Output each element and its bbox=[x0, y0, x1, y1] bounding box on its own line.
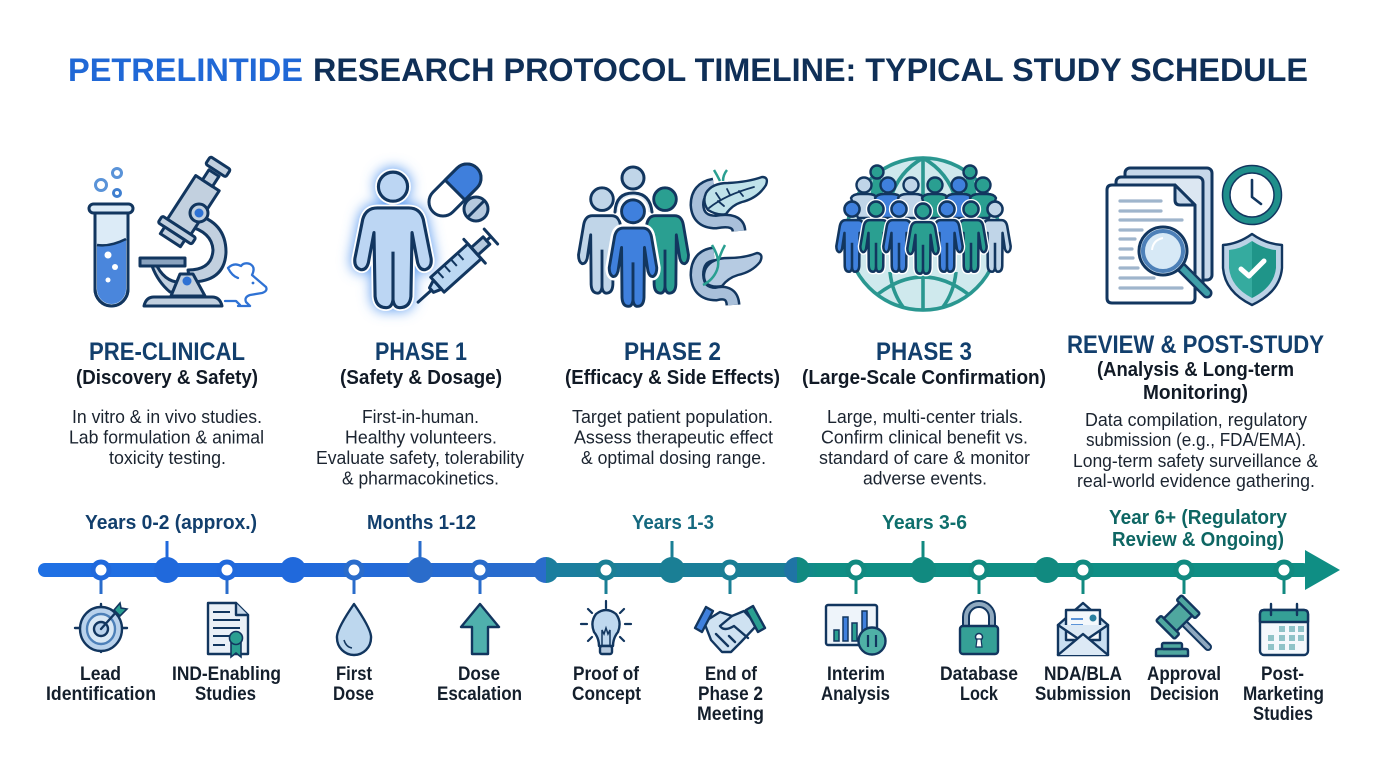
milestone: lead identification bbox=[46, 603, 156, 705]
label: End of bbox=[705, 664, 758, 685]
label: Escalation bbox=[437, 684, 522, 705]
period labels bbox=[85, 507, 1288, 551]
milestone: IND-enabling studies bbox=[172, 603, 281, 705]
label: Proof of bbox=[573, 664, 640, 685]
panel: phase 2 bbox=[565, 167, 780, 468]
label: Studies bbox=[195, 684, 256, 705]
text block: pre-clinical: Lab formulation & animal bbox=[69, 428, 264, 448]
label: Post- bbox=[1261, 664, 1304, 685]
subtitle: review and post-study: Monitoring) bbox=[1143, 382, 1248, 404]
label: Meeting bbox=[697, 704, 764, 725]
label: Studies bbox=[1253, 704, 1313, 725]
milestone: proof of concept bbox=[572, 601, 642, 705]
period labels: Years 3-6 bbox=[882, 512, 967, 534]
subtitle: review and post-study: (Analysis & Long-term bbox=[1097, 359, 1294, 381]
label bbox=[46, 664, 156, 705]
icon: volunteer, pills and syringe bbox=[354, 158, 502, 314]
text block: review and post-study: Data compilation, regulatory bbox=[1085, 410, 1307, 430]
milestone: post-marketing studies bbox=[1243, 604, 1324, 725]
heading: pre-clinical: PRE-CLINICAL bbox=[89, 338, 245, 366]
panel: phase 3 bbox=[802, 156, 1046, 488]
label: Marketing bbox=[1243, 684, 1324, 705]
icon: envelope bbox=[1058, 603, 1108, 655]
text block: phase 2 bbox=[572, 407, 773, 468]
panel: review and post-study bbox=[1067, 166, 1324, 491]
label bbox=[1243, 664, 1324, 725]
text block: phase 3: Large, multi-center trials. bbox=[827, 407, 1023, 427]
subtitle: phase 2: (Efficacy & Side Effects) bbox=[565, 367, 780, 389]
text block: phase 2: Target patient population. bbox=[572, 407, 773, 427]
text block: phase 1: First-in-human. bbox=[362, 407, 479, 427]
text block: phase 3: adverse events. bbox=[863, 468, 987, 488]
title: PETRELINTIDE bbox=[68, 52, 303, 88]
milestone: database lock bbox=[940, 604, 1018, 705]
label bbox=[333, 664, 374, 705]
icon: test tube, microscope and mouse bbox=[89, 152, 266, 306]
milestone: interim analysis bbox=[821, 605, 890, 705]
label: Identification bbox=[46, 684, 156, 705]
icon: light bulb bbox=[581, 601, 631, 654]
text block: phase 3: standard of care & monitor bbox=[819, 448, 1030, 468]
label: Database bbox=[940, 664, 1018, 685]
milestone: approval decision bbox=[1147, 595, 1221, 705]
text block: pre-clinical: In vitro & in vivo studies. bbox=[72, 407, 262, 427]
label: Decision bbox=[1150, 684, 1219, 705]
label bbox=[821, 664, 890, 705]
text block: review and post-study bbox=[1073, 410, 1318, 491]
label: Dose bbox=[333, 684, 374, 705]
label bbox=[1147, 664, 1221, 705]
text block: review and post-study: Long-term safety surveillance & bbox=[1073, 451, 1318, 471]
heading: phase 3: PHASE 3 bbox=[876, 338, 972, 366]
milestone: NDA/BLA submission bbox=[1035, 603, 1131, 705]
icon: drop bbox=[337, 604, 371, 655]
text block: review and post-study: real-world evidence gathering. bbox=[1077, 471, 1315, 491]
label: NDA/BLA bbox=[1044, 664, 1122, 685]
text block: phase 2: & optimal dosing range. bbox=[581, 448, 766, 468]
milestone: first dose bbox=[333, 604, 374, 705]
subtitle: phase 3: (Large-Scale Confirmation) bbox=[802, 367, 1046, 389]
panel: phase 1 bbox=[316, 158, 524, 489]
timeline arrow bbox=[38, 541, 1340, 594]
icon: target bbox=[75, 603, 127, 652]
title: RESEARCH PROTOCOL TIMELINE: TYPICAL STUDY SCHEDULE bbox=[313, 52, 1308, 88]
period labels: Year 6+ (Regulatory bbox=[1109, 507, 1288, 529]
label bbox=[437, 664, 522, 705]
heading: phase 1: PHASE 1 bbox=[375, 338, 467, 366]
label: First bbox=[336, 664, 373, 685]
icon: handshake bbox=[695, 606, 765, 652]
milestone: end of phase 2 meeting bbox=[695, 606, 765, 725]
heading: review and post-study: REVIEW & POST-STUDY bbox=[1067, 331, 1324, 359]
icon: population on globe bbox=[836, 156, 1011, 312]
text block: phase 1: Healthy volunteers. bbox=[345, 428, 497, 448]
label bbox=[940, 664, 1018, 705]
text block: phase 1: & pharmacokinetics. bbox=[342, 468, 499, 488]
heading: phase 2: PHASE 2 bbox=[624, 338, 721, 366]
label bbox=[1035, 664, 1131, 705]
label bbox=[172, 664, 281, 705]
text block: phase 3: Confirm clinical benefit vs. bbox=[821, 428, 1028, 448]
label: Concept bbox=[572, 684, 642, 705]
icon: chart with pause bbox=[826, 605, 886, 654]
text block: pre-clinical: toxicity testing. bbox=[109, 448, 226, 468]
period labels: Months 1-12 bbox=[367, 512, 476, 534]
text block: pre-clinical bbox=[69, 407, 264, 468]
label: Dose bbox=[458, 664, 500, 685]
icon: certified document bbox=[208, 603, 248, 657]
icon: documents, magnifier, clock and shield bbox=[1107, 166, 1282, 305]
icon: calendar bbox=[1260, 604, 1308, 655]
label bbox=[572, 664, 642, 705]
label: Interim bbox=[827, 664, 885, 685]
label: Lead bbox=[80, 664, 121, 685]
panel: pre-clinical bbox=[69, 152, 266, 468]
label bbox=[697, 664, 764, 725]
icon: up arrow bbox=[461, 604, 499, 654]
icon: gavel bbox=[1156, 595, 1208, 656]
text block: phase 3 bbox=[819, 407, 1030, 488]
subtitle: phase 1: (Safety & Dosage) bbox=[340, 367, 502, 389]
period labels: Years 0-2 (approx.) bbox=[85, 512, 257, 534]
label: Approval bbox=[1147, 664, 1221, 685]
label: IND-Enabling bbox=[172, 664, 281, 685]
label: Lock bbox=[960, 684, 998, 705]
text block: phase 2: Assess therapeutic effect bbox=[574, 428, 773, 448]
label: Phase 2 bbox=[698, 684, 763, 705]
text block: phase 1 bbox=[316, 407, 524, 488]
subtitle: pre-clinical: (Discovery & Safety) bbox=[76, 367, 258, 389]
milestone: dose escalation bbox=[437, 604, 522, 705]
text block: review and post-study: submission (e.g., FDA/EMA). bbox=[1086, 430, 1306, 450]
icon: padlock bbox=[960, 604, 998, 654]
subtitle: review and post-study bbox=[1097, 359, 1294, 404]
icon: patient group and pancreas bbox=[579, 167, 767, 306]
text block: phase 1: Evaluate safety, tolerability bbox=[316, 448, 524, 468]
period labels: Years 1-3 bbox=[632, 512, 714, 534]
label: Submission bbox=[1035, 684, 1131, 705]
label: Analysis bbox=[821, 684, 890, 705]
period labels: Review & Ongoing) bbox=[1112, 529, 1284, 551]
